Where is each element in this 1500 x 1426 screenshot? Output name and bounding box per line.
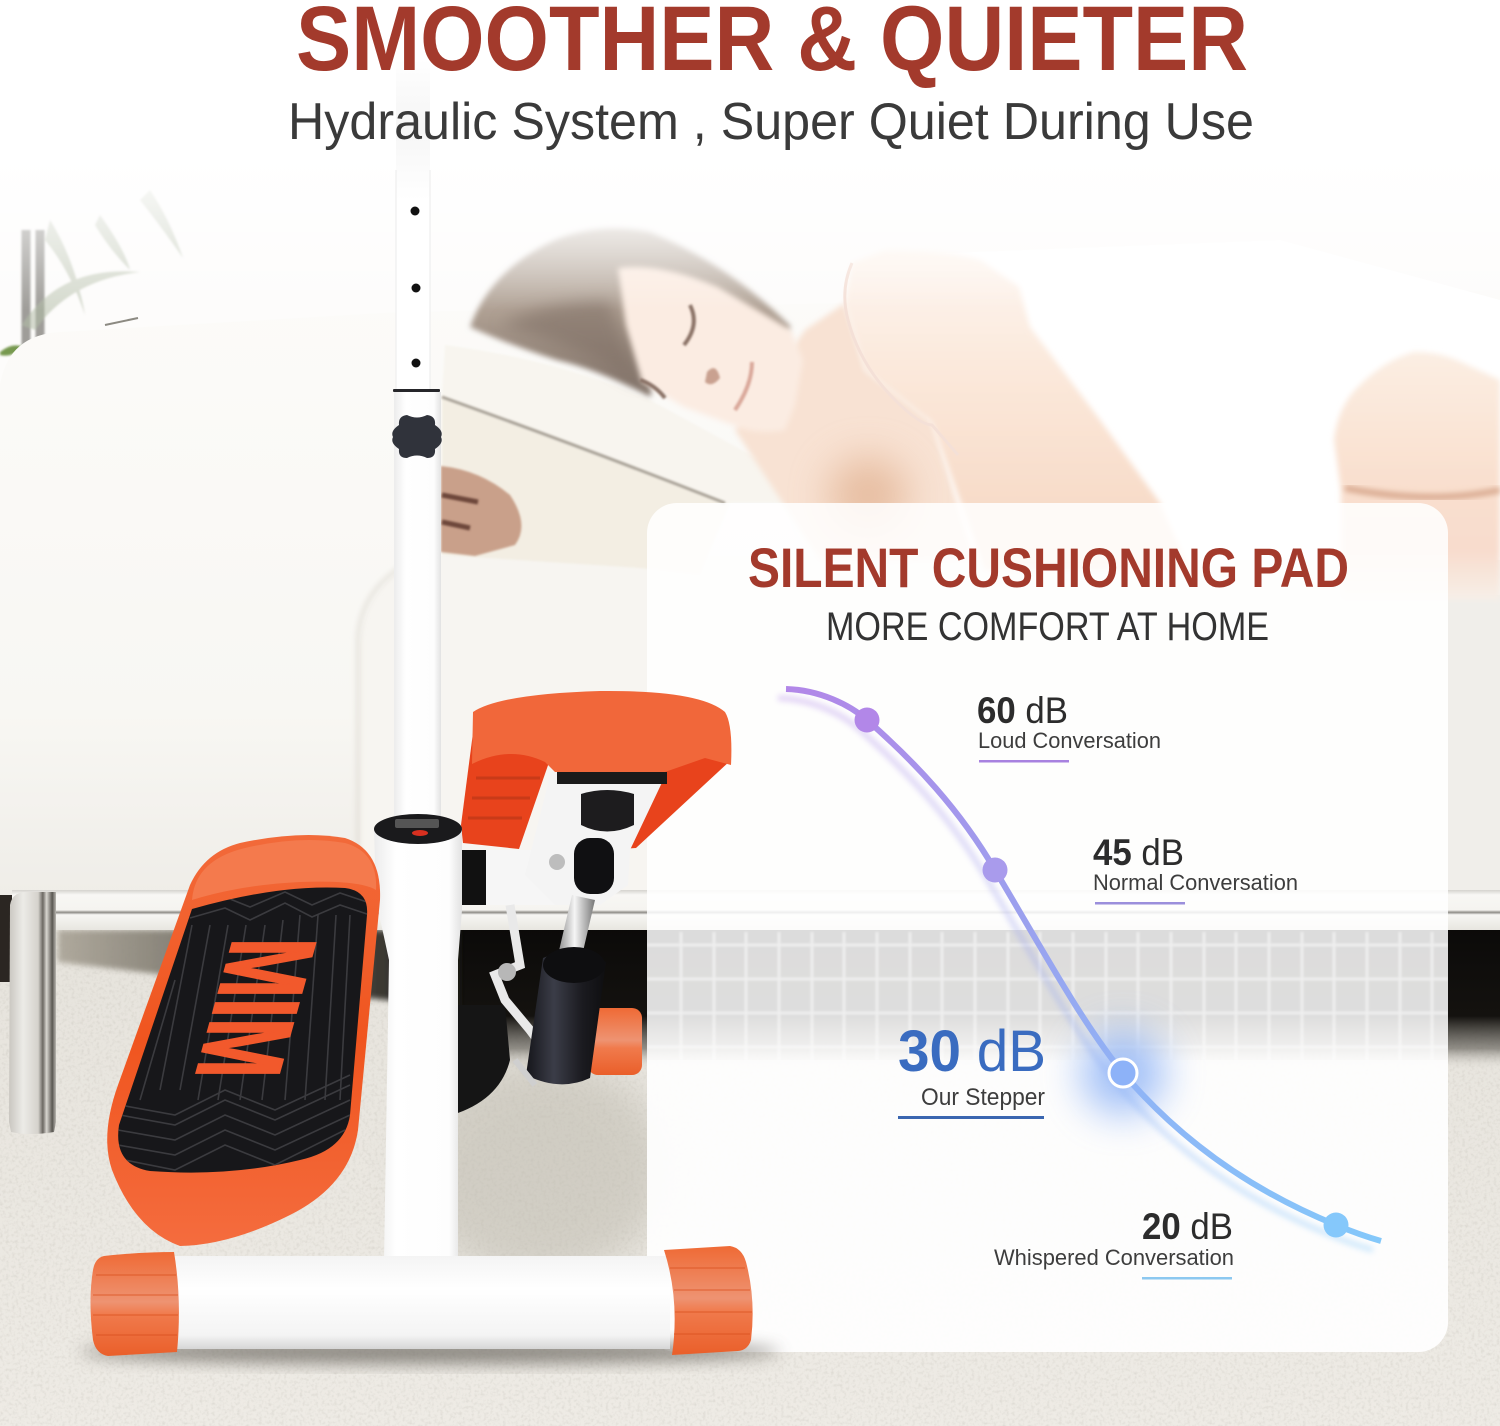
carpet shade beside stepper — [410, 1060, 670, 1280]
fade to white at top — [0, 0, 1500, 310]
marker 45 dB — [982, 858, 1008, 882]
right pedal side left — [461, 725, 555, 849]
top strap — [845, 263, 958, 455]
icon: black knob — [392, 415, 442, 458]
chrome rail — [12, 890, 1500, 930]
piston rod — [558, 895, 595, 960]
woman sleeping — [441, 228, 1500, 600]
lower pole — [394, 392, 441, 824]
central post — [374, 828, 462, 1260]
axle housing — [458, 850, 520, 905]
upper adjustable pole — [396, 60, 430, 392]
rubber mat — [118, 887, 367, 1173]
black collar — [374, 814, 462, 844]
carpet floor — [0, 925, 1500, 1426]
marker 20 dB — [1324, 1212, 1348, 1238]
right pedal top — [472, 691, 731, 772]
shadow under sofa — [440, 928, 1500, 1070]
label: 30 dB our stepper: Our Stepper — [921, 1084, 1045, 1111]
hip — [1334, 352, 1500, 600]
white bracket — [525, 772, 667, 905]
bolt — [549, 854, 565, 870]
face — [618, 267, 803, 432]
left end cap — [90, 1252, 179, 1356]
label: 60 dB: 60 dB — [977, 690, 1068, 731]
label: 45 dB: Normal Conversation — [1093, 870, 1298, 895]
marker 60 dB — [854, 708, 880, 732]
label: 20 dB: 20 dB — [1142, 1206, 1233, 1247]
rear black disc — [450, 1005, 510, 1115]
panel heading: SILENT CUSHIONING PAD — [748, 536, 1349, 599]
chrome sofa leg — [9, 892, 56, 1134]
black roller — [574, 838, 614, 894]
label: 60 dB — [977, 690, 1161, 762]
pillow — [442, 345, 830, 503]
cushion behind pillow — [442, 397, 730, 575]
panel subheading: MORE COMFORT AT HOME — [826, 605, 1269, 649]
label: 60 dB: Loud Conversation — [978, 728, 1161, 753]
label: 45 dB: 45 dB — [1093, 832, 1184, 873]
ground shadow — [80, 1340, 780, 1364]
panel: silent cushioning chart background — [647, 503, 1448, 1352]
label: 20 dB: Whispered Conversation — [994, 1245, 1234, 1270]
marker 30 dB — [1109, 1059, 1137, 1087]
sofa seat cushion — [360, 556, 1500, 895]
hair — [470, 228, 791, 397]
right end cap — [664, 1246, 753, 1355]
plant — [0, 190, 183, 370]
subheading: Hydraulic System , Super Quiet During Use — [288, 93, 1254, 151]
logo MIM: MIM — [169, 938, 341, 1078]
hydraulic cylinder — [526, 952, 606, 1084]
bumper — [581, 790, 634, 832]
stepper machine — [80, 60, 780, 1364]
white bed sheet — [900, 240, 1500, 560]
arm and shoulder — [845, 250, 1190, 570]
label: 30 dB our stepper — [898, 1019, 1046, 1119]
label: 20 dB — [994, 1206, 1234, 1280]
back orange roller — [588, 1008, 642, 1075]
right pedal side right — [605, 745, 731, 850]
chest — [735, 303, 975, 560]
glow at 30 dB — [1081, 1031, 1165, 1115]
hand — [441, 466, 521, 556]
left pedal — [107, 835, 380, 1246]
label: 30 dB our stepper: 30 dB — [898, 1019, 1046, 1084]
base bar — [170, 1256, 670, 1349]
sofa back and arm — [0, 290, 1500, 895]
label: 45 dB — [1093, 832, 1298, 904]
chart: noise level curve — [778, 689, 1381, 1250]
